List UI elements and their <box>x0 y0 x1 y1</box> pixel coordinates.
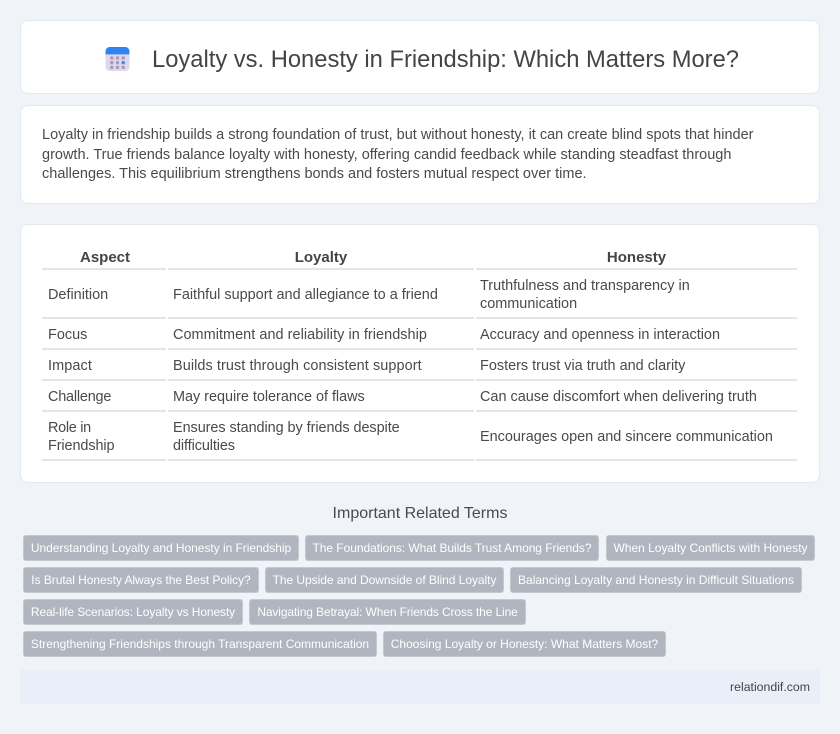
comparison table: Focus <box>48 327 87 343</box>
comparison table: communication <box>480 296 577 312</box>
intro panel <box>20 105 820 204</box>
table header: Honesty <box>607 249 666 266</box>
title: Loyalty vs. Honesty in Friendship: Which Matters More? <box>152 47 739 73</box>
comparison table: Truthfulness and transparency in <box>480 278 690 294</box>
table header <box>80 249 666 266</box>
comparison table: difficulties <box>173 438 235 454</box>
comparison table: Faithful support and allegiance to a friend <box>173 287 438 303</box>
comparison table panel <box>20 224 820 483</box>
comparison table <box>42 249 797 461</box>
comparison table: Friendship <box>48 438 114 454</box>
related terms tags: Strengthening Friendships through Transparent Communication <box>31 637 369 651</box>
related terms tags: Is Brutal Honesty Always the Best Policy? <box>31 573 251 587</box>
comparison table: Can cause discomfort when delivering truth <box>480 389 757 405</box>
comparison table: Builds trust through consistent support <box>173 358 422 374</box>
intro text: growth. True friends balance loyalty with honesty, offering candid feedback while standing steadfast through <box>42 147 731 163</box>
comparison table: Role in <box>48 420 91 436</box>
table header: Aspect <box>80 249 130 266</box>
related terms heading: Important Related Terms <box>333 505 507 522</box>
related terms tags: Understanding Loyalty and Honesty in Friendship <box>31 541 291 555</box>
related terms tags: Real-life Scenarios: Loyalty vs Honesty <box>31 605 235 619</box>
related terms tags <box>23 535 815 657</box>
comparison table: Encourages open and sincere communication <box>480 429 773 445</box>
related terms tags: The Upside and Downside of Blind Loyalty <box>273 573 496 587</box>
comparison table: Impact <box>48 358 92 374</box>
table header: Loyalty <box>295 249 347 266</box>
intro text: Loyalty in friendship builds a strong foundation of trust, but without honesty, it can create blind spots that hinder <box>42 127 753 143</box>
related terms tags: When Loyalty Conflicts with Honesty <box>613 541 808 555</box>
comparison table: Definition <box>48 287 108 303</box>
related terms tags: The Foundations: What Builds Trust Among Friends? <box>312 541 592 555</box>
comparison table: Challenge <box>48 389 111 405</box>
intro text: challenges. This equilibrium strengthens bonds and fosters mutual respect over time. <box>42 166 587 182</box>
header card <box>20 20 820 94</box>
comparison table: Commitment and reliability in friendship <box>173 327 427 343</box>
comparison table: Fosters trust via truth and clarity <box>480 358 685 374</box>
comparison table: May require tolerance of flaws <box>173 389 365 405</box>
related terms tags: Choosing Loyalty or Honesty: What Matters Most? <box>391 637 658 651</box>
icon: calendar <box>106 47 130 71</box>
related terms tags: Navigating Betrayal: When Friends Cross the Line <box>257 605 518 619</box>
footer site name: relationdif.com <box>730 680 810 694</box>
comparison table: Accuracy and openness in interaction <box>480 327 720 343</box>
footer bar <box>20 670 820 704</box>
related terms tags: Balancing Loyalty and Honesty in Difficult Situations <box>518 573 794 587</box>
comparison table: Ensures standing by friends despite <box>173 420 400 436</box>
intro text <box>42 127 754 182</box>
